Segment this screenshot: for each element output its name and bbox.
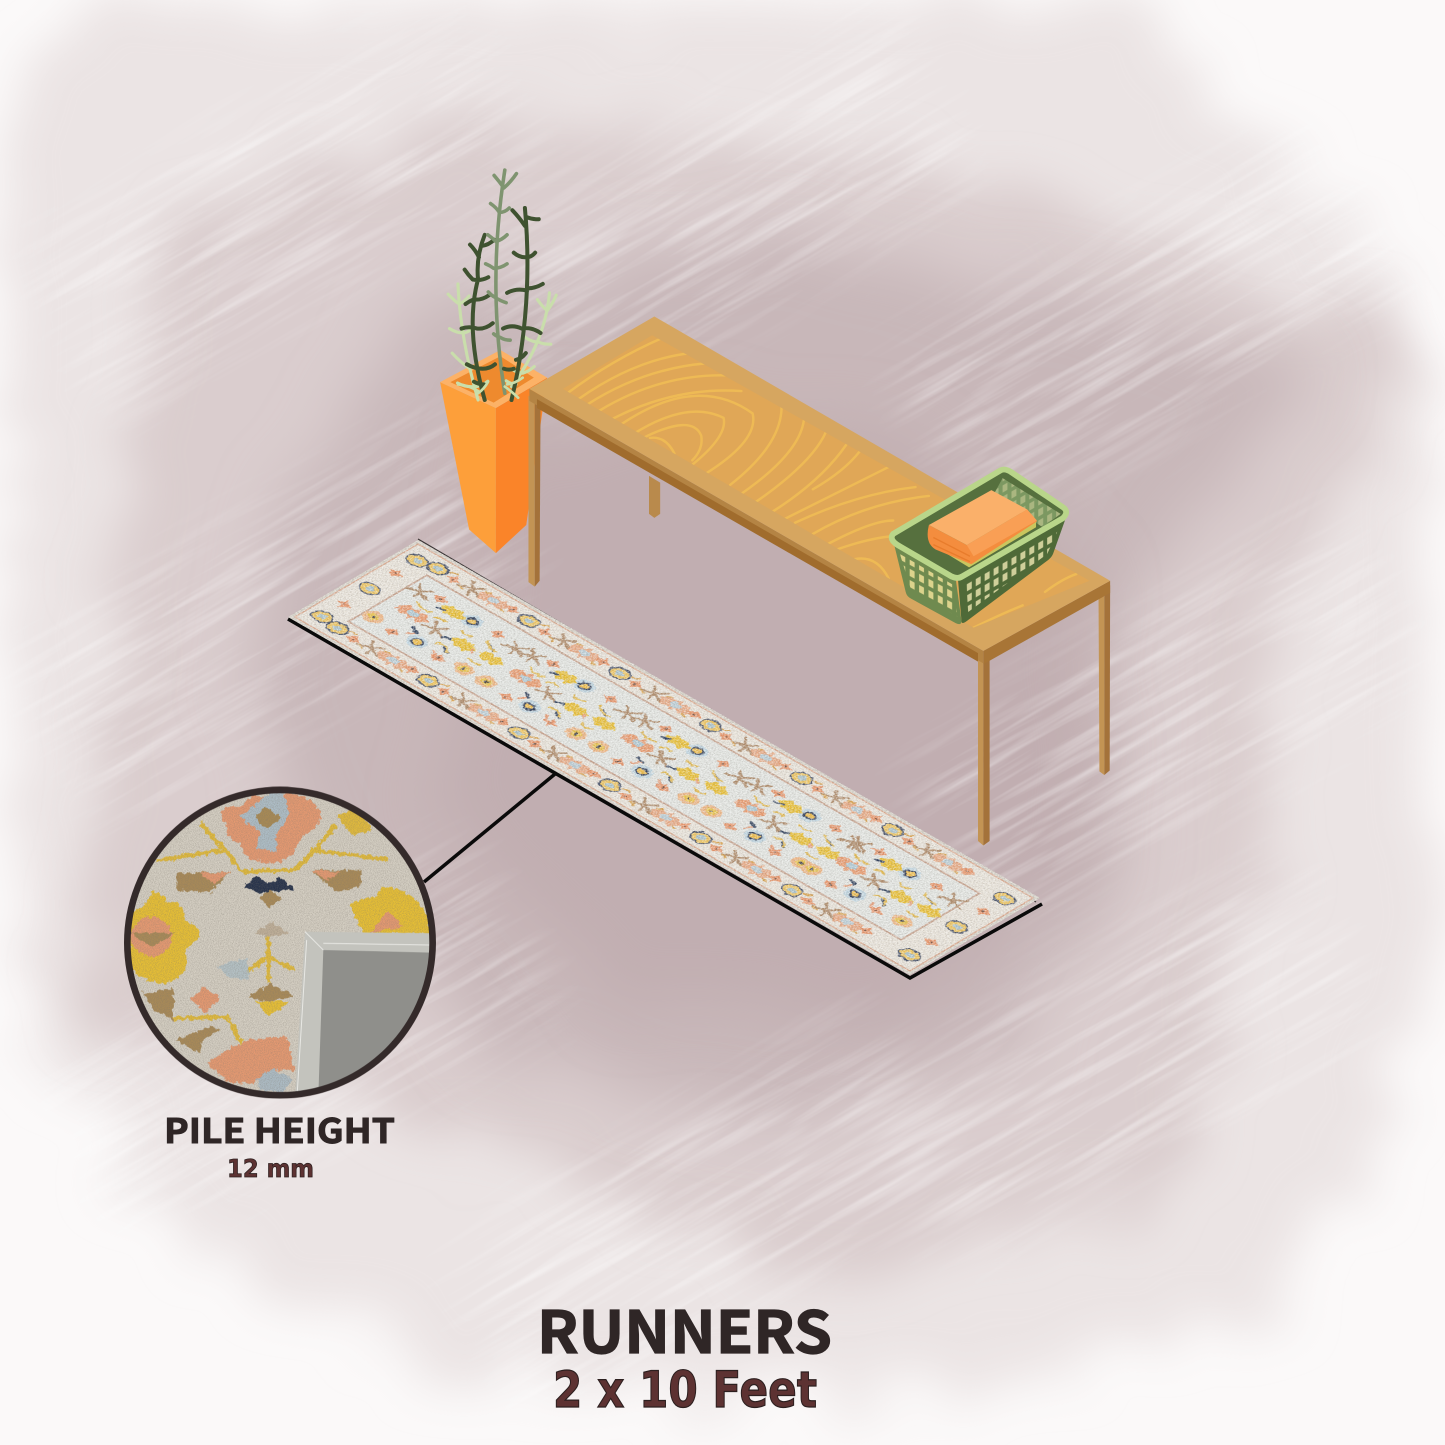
table legs: [528, 396, 1110, 845]
planter pot: [440, 350, 547, 553]
basket interior: [892, 470, 1066, 578]
towels: [928, 490, 1037, 567]
navy motif: [243, 877, 295, 893]
table: [528, 317, 1110, 845]
rug runner: [288, 539, 1042, 978]
left yellow flower: [130, 892, 200, 983]
label: pile height: PILE HEIGHT: [164, 1104, 395, 1153]
sprig and diamonds: [143, 922, 295, 1092]
yellow vine lines: [157, 823, 387, 1043]
callout leader line: [424, 774, 555, 882]
top orange flower: [220, 790, 321, 863]
rug shadow edge: [288, 619, 1042, 978]
basket rim: [892, 470, 1066, 578]
plant: [448, 170, 556, 400]
table top: [529, 317, 1110, 651]
laundry basket: [892, 470, 1067, 624]
folded rug corner: [295, 932, 433, 1097]
pile height magnifier circle: [127, 790, 433, 1097]
rug surface with pattern: [288, 540, 1040, 975]
basket front faces: [893, 541, 961, 624]
subtitle: size: 2 x 10 Feet: [553, 1361, 817, 1419]
right yellow flower: [350, 886, 430, 933]
rug back edge line: [418, 539, 1036, 902]
wood grain panel: [563, 335, 1090, 628]
scene: plant, table and basket: [440, 170, 1110, 845]
brown and orange leaves: [177, 870, 362, 893]
title: runners: RUNNERS: [537, 1286, 832, 1370]
table apron: [529, 389, 1110, 664]
label: 12 mm: 12 mm: [227, 1154, 314, 1183]
